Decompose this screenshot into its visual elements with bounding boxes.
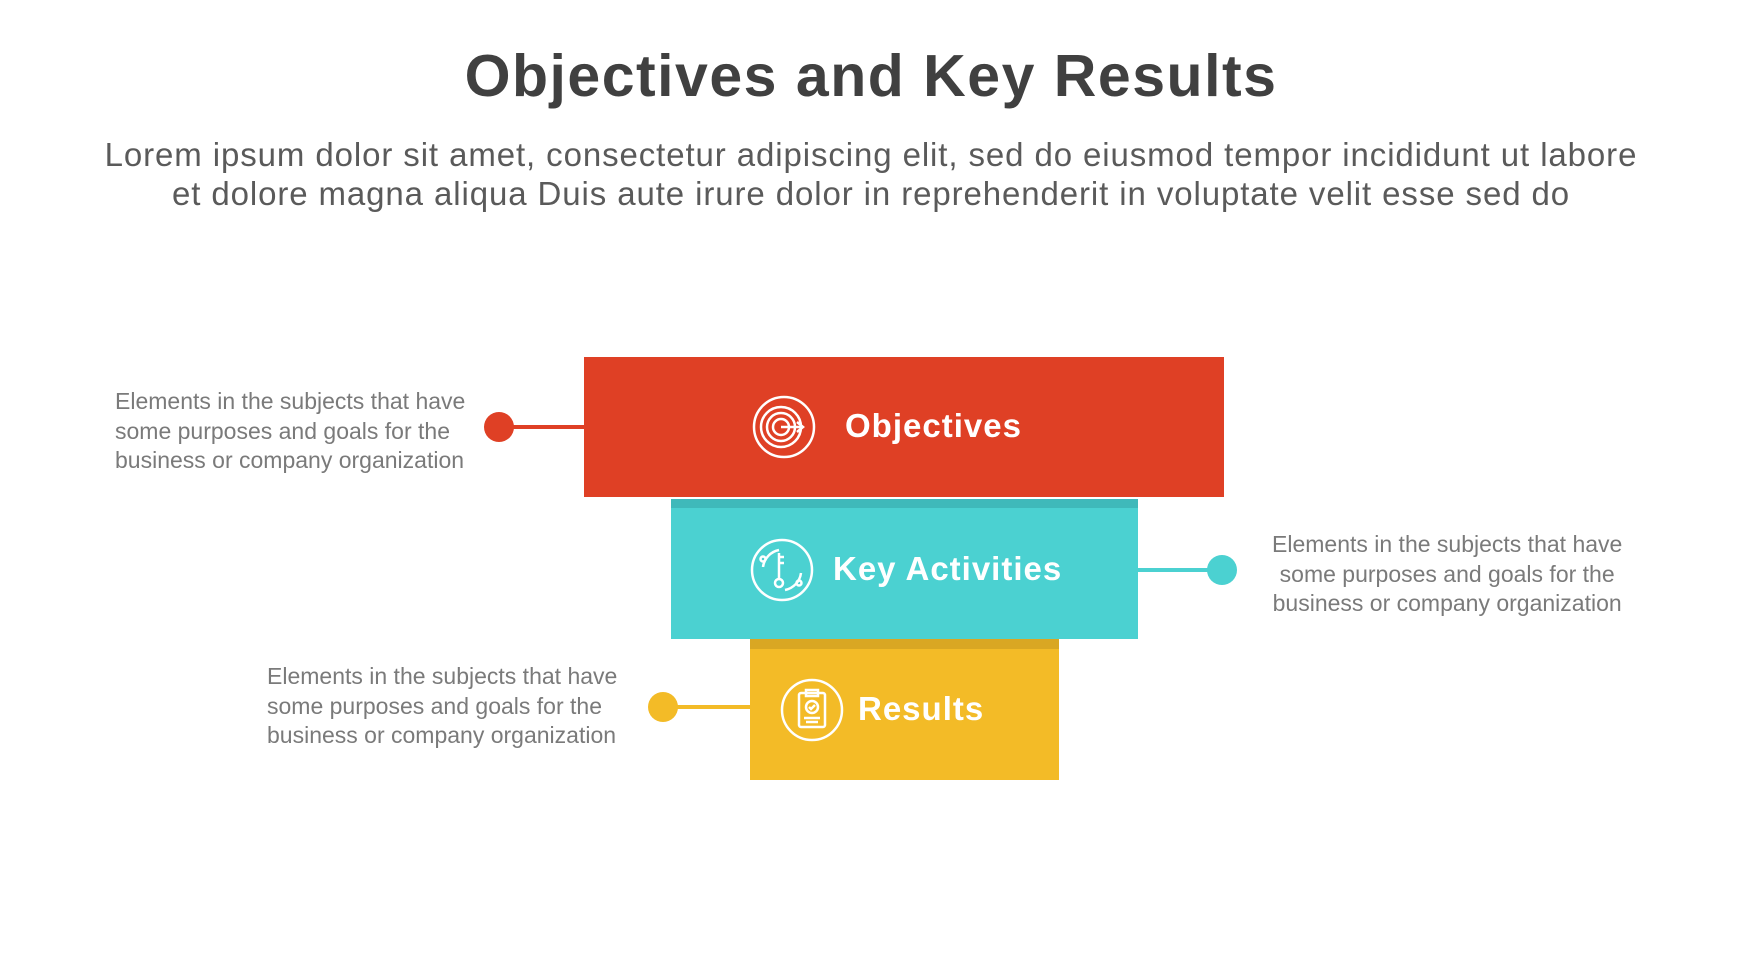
label: Results: Results [858,690,984,727]
text: objectives description: some purposes and goals for the [115,418,450,444]
connector: results [648,692,750,722]
text: objectives description [115,388,465,473]
text: key activities description [1272,531,1622,616]
icon: target [752,396,816,458]
text: results description: business or company organization [267,722,616,748]
subtitle text [105,136,1637,212]
block: key activities [671,499,1138,639]
text: objectives description: business or company organization [115,447,464,473]
icon: key [750,538,814,602]
label: Objectives: Objectives [845,407,1022,444]
block: results [750,639,1059,780]
subtitle text: et dolore magna aliqua Duis aute irure dolor in reprehenderit in voluptate velit esse sed do [172,175,1570,212]
text: key activities description: business or company organization [1273,590,1622,616]
text: key activities description: Elements in the subjects that have [1272,531,1622,557]
text: results description: some purposes and goals for the [267,692,602,718]
connector: key activities [1138,555,1237,585]
text: results description [267,663,617,748]
block: objectives [584,357,1224,497]
text: results description: Elements in the subjects that have [267,663,617,689]
text: key activities description: some purposes and goals for the [1280,560,1615,586]
text: objectives description: Elements in the subjects that have [115,388,465,414]
connector: objectives [484,412,584,442]
title: Objectives and Key Results [465,43,1277,109]
label: Key Activities: Key Activities [833,550,1062,587]
icon: clipboard [780,678,844,742]
subtitle text: Lorem ipsum dolor sit amet, consectetur adipiscing elit, sed do eiusmod tempor incididunt ut labore [105,136,1637,173]
